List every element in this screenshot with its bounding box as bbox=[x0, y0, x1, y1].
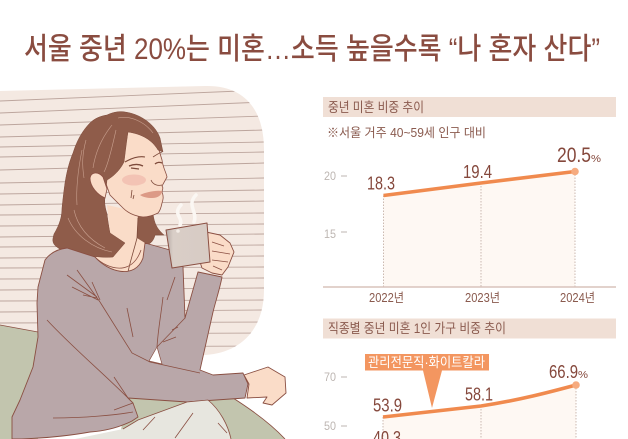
facial features bbox=[122, 152, 162, 272]
callout: 관리전문직·화이트칼라 bbox=[368, 355, 486, 370]
callout bbox=[365, 354, 489, 408]
ear bbox=[90, 173, 107, 198]
heading: 직종별 중년 미혼 1인 가구 비중 추이 bbox=[328, 321, 506, 336]
main hair bbox=[53, 112, 163, 257]
hair strands bbox=[68, 117, 153, 252]
line chart: 20 bbox=[324, 169, 336, 183]
back hair patch bbox=[137, 215, 164, 244]
line chart: 18.3 bbox=[367, 174, 395, 194]
line chart: 58.1 bbox=[465, 384, 493, 404]
line chart: 15 bbox=[324, 227, 336, 241]
line chart: 2024년 bbox=[560, 291, 595, 305]
neck and chest bbox=[95, 205, 145, 272]
panel: single household ratio by occupation bbox=[323, 318, 616, 439]
illustration background with blinds bbox=[0, 86, 264, 355]
panel: middle-aged unmarried ratio trend bbox=[323, 97, 616, 305]
lower hand bbox=[244, 367, 286, 405]
steam bbox=[178, 195, 196, 225]
note: ※서울 거주 40~59세 인구 대비 bbox=[327, 126, 486, 140]
heading: 중년 미혼 비중 추이 bbox=[328, 100, 424, 115]
line chart: 70 bbox=[324, 370, 336, 384]
gap between arm and torso bbox=[149, 347, 162, 364]
line chart: 2023년 bbox=[465, 291, 500, 305]
illustration: woman with coffee bbox=[0, 86, 286, 439]
finger lines bbox=[212, 242, 230, 270]
sweater: torso and arms bbox=[12, 243, 248, 439]
line chart: 53.9 bbox=[373, 396, 402, 416]
raised hand bbox=[200, 232, 234, 275]
line chart: 2022년 bbox=[369, 291, 404, 305]
line chart: 20.5 bbox=[557, 144, 591, 167]
line chart: 19.4 bbox=[463, 162, 492, 182]
face bbox=[104, 131, 167, 217]
sofa bbox=[0, 325, 285, 439]
line chart: % bbox=[578, 370, 588, 381]
trouser outline and folds bbox=[123, 400, 231, 439]
line chart bbox=[323, 144, 616, 305]
coffee mug bbox=[166, 223, 210, 268]
line chart: 50 bbox=[324, 419, 336, 433]
trousers bbox=[75, 400, 231, 439]
heading bbox=[323, 318, 616, 338]
heading bbox=[323, 97, 616, 117]
line chart: 66.9 bbox=[549, 362, 578, 382]
sweater folds bbox=[47, 250, 200, 418]
line chart bbox=[324, 362, 588, 439]
line chart: % bbox=[591, 154, 601, 165]
